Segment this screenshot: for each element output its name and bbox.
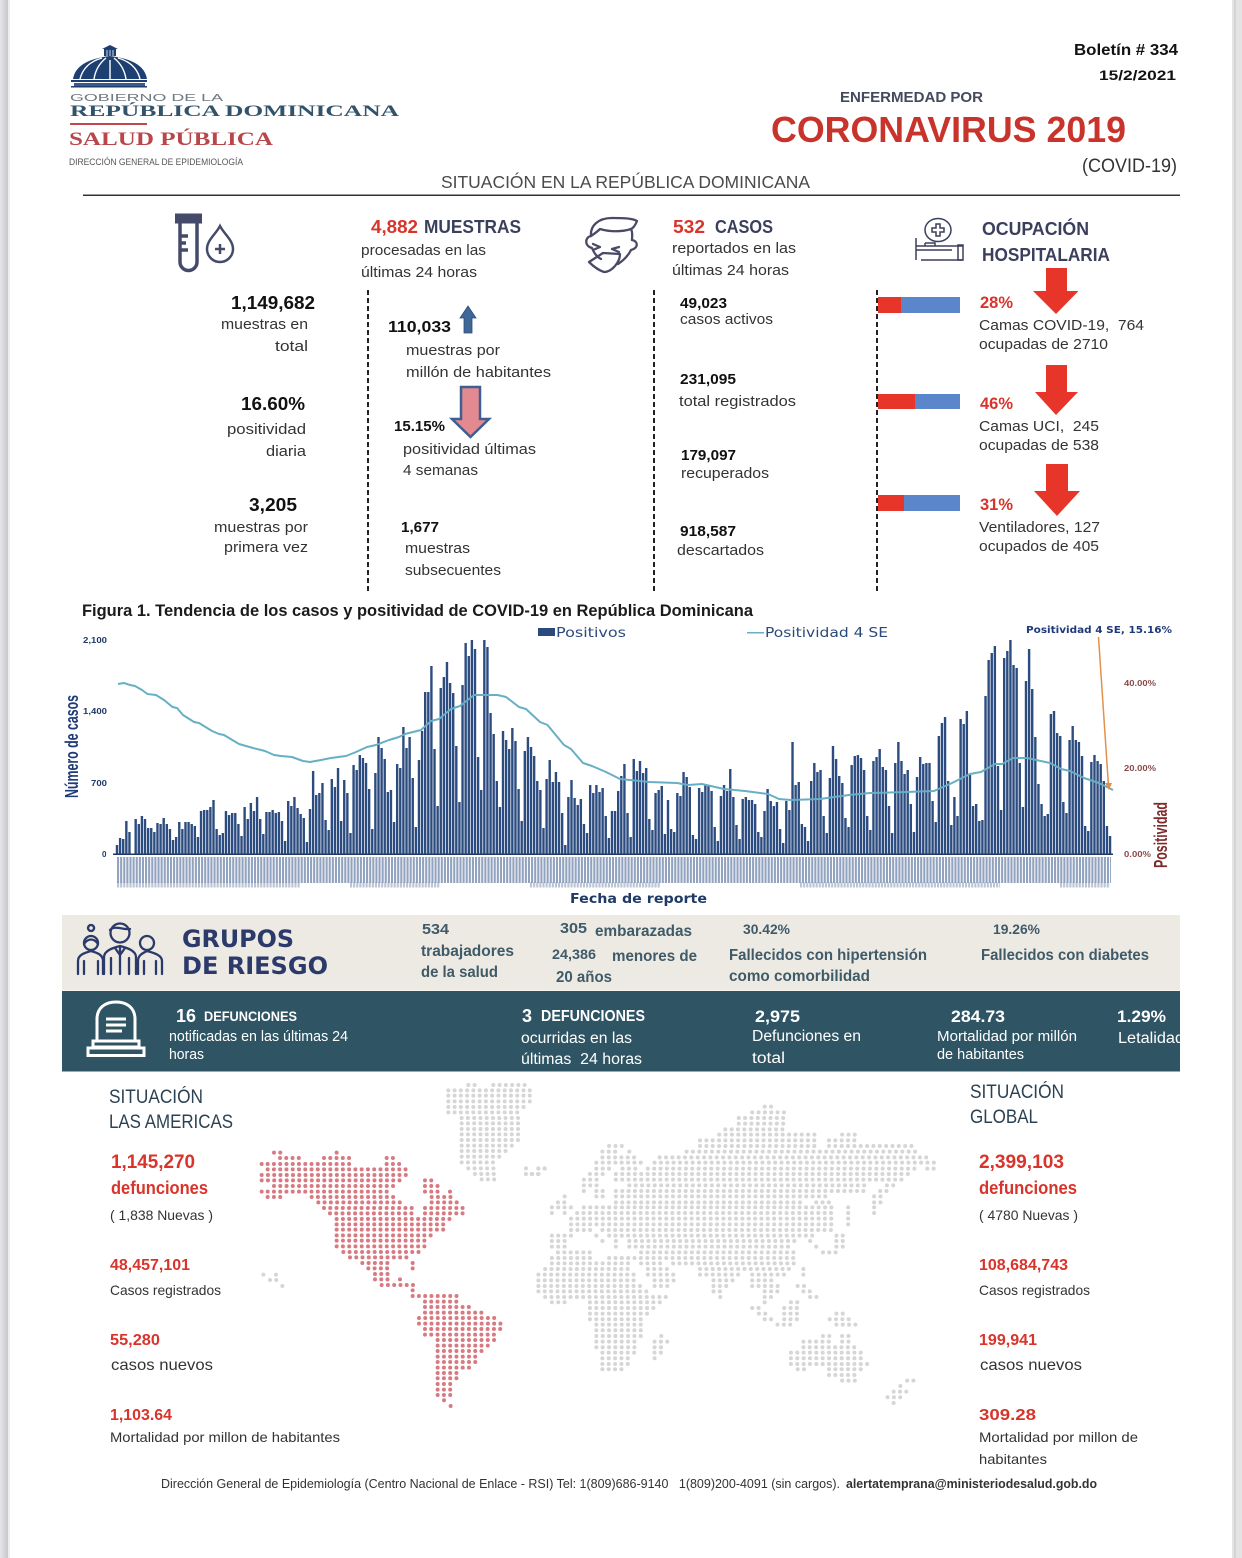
stat: casos activos bbox=[680, 296, 773, 328]
title kicker: ENFERMEDAD POR bbox=[840, 89, 983, 106]
muestras headline bbox=[371, 216, 521, 237]
casos description bbox=[672, 240, 796, 279]
panel: muestras bbox=[176, 215, 521, 556]
stat: positividad últimas 4 semanas bbox=[394, 419, 536, 479]
text: camas uci: ocupadas de 538 bbox=[979, 437, 1099, 454]
map: greenland and hawaii bbox=[263, 1085, 546, 1286]
text: camas covid bbox=[979, 293, 1144, 353]
bar: camas covid 28% bbox=[878, 297, 960, 313]
group: trabajadores de la salud: de la salud bbox=[421, 964, 498, 981]
bulletin date: 15/2/2021 bbox=[1099, 67, 1176, 83]
group: diabetes: 19.26% bbox=[993, 921, 1041, 937]
americas deaths: 1,145,270 bbox=[111, 1152, 195, 1173]
text: camas covid: ocupadas de 2710 bbox=[979, 336, 1108, 353]
stat: descartados: descartados bbox=[677, 542, 764, 559]
date ticks bbox=[117, 870, 1111, 885]
stat: letalidad: 1.29% bbox=[1117, 1007, 1166, 1026]
global mortality: 309.28 bbox=[979, 1407, 1036, 1424]
stat: positividad últimas 4 semanas: positividad últimas bbox=[403, 441, 536, 458]
global mortality: habitantes bbox=[979, 1451, 1047, 1467]
left axis labels: 2,100 bbox=[83, 636, 108, 645]
stat: mortalidad por millón bbox=[938, 1010, 1076, 1059]
hospital heading bbox=[982, 218, 1110, 265]
stat: recuperados bbox=[681, 448, 769, 482]
stat: 3 defunciones: 3 bbox=[522, 1006, 532, 1026]
divider: logo red line bbox=[70, 123, 147, 125]
stat: positividad diaria: 16.60% bbox=[241, 393, 305, 414]
stat: recuperados: 179,097 bbox=[681, 448, 736, 464]
stat: muestras por millón: millón de habitantes bbox=[406, 364, 551, 381]
item: ventiladores bbox=[878, 464, 1100, 555]
arrow: down red bbox=[1035, 365, 1078, 415]
arrow: up bbox=[460, 306, 476, 333]
grupos heading: GRUPOS bbox=[182, 925, 294, 953]
casos description: reportados en las bbox=[672, 240, 796, 257]
group: diabetes: Fallecidos con diabetes bbox=[981, 947, 1149, 964]
text: camas covid: 28% bbox=[980, 293, 1013, 312]
stat: defunciones en total: 2,975 bbox=[755, 1007, 800, 1026]
muestras headline: 4,882 bbox=[371, 216, 418, 237]
americas new cases: 55,280 bbox=[110, 1332, 160, 1349]
icon: dome bbox=[71, 45, 147, 88]
stat: positividad diaria bbox=[227, 393, 307, 460]
section heading: SITUACIÓN EN LA REPÚBLICA DOMINICANA bbox=[441, 171, 810, 192]
global new cases bbox=[979, 1332, 1082, 1374]
text: ventiladores bbox=[979, 495, 1100, 555]
stat: muestras en total: total bbox=[275, 338, 308, 355]
americas cases bbox=[110, 1257, 221, 1298]
group: menores de 20 años: 24,386 bbox=[552, 946, 596, 962]
muestras description: últimas 24 horas bbox=[361, 264, 477, 281]
group: hipertensión bbox=[729, 921, 927, 985]
text: dirección general de epidemiología: DIRECCIÓN GENERAL DE EPIDEMIOLOGÍA bbox=[69, 157, 244, 168]
global deaths: defunciones bbox=[979, 1178, 1077, 1198]
americas new cases bbox=[110, 1332, 213, 1374]
text: salud pública: SALUD PÚBLICA bbox=[69, 128, 273, 150]
group: hipertensión: 30.42% bbox=[743, 921, 791, 937]
americas mortality: 1,103.64 bbox=[110, 1407, 172, 1424]
stat: total registrados bbox=[679, 372, 796, 410]
arrow: down red bbox=[1033, 268, 1078, 314]
icon: group of people bbox=[78, 924, 162, 974]
stat: defunciones en total bbox=[752, 1010, 860, 1063]
stat: muestras por millón: 110,033 bbox=[388, 319, 451, 336]
stat: total registrados: 231,095 bbox=[680, 372, 736, 388]
global mortality: Mortalidad por millon de bbox=[979, 1429, 1138, 1445]
header: bulletin number and title bbox=[441, 42, 1178, 192]
stat: casos activos: casos activos bbox=[680, 311, 773, 328]
global heading: SITUACIÓN bbox=[970, 1081, 1064, 1103]
stat: letalidad: Letalidad bbox=[1118, 1030, 1184, 1047]
text: gobierno de la: GOBIERNO DE LA bbox=[70, 92, 223, 104]
map: americas highlighted bbox=[262, 1085, 546, 1406]
americas deaths bbox=[110, 1152, 213, 1223]
stat: casos activos: 49,023 bbox=[680, 296, 727, 312]
chart legend: Positivos bbox=[556, 625, 626, 641]
group: trabajadores de la salud: trabajadores bbox=[421, 943, 514, 960]
americas cases: 48,457,101 bbox=[110, 1257, 190, 1274]
stat: positividad últimas 4 semanas: 15.15% bbox=[394, 419, 445, 435]
left axis labels: 0 bbox=[102, 850, 107, 859]
stat: muestras por primera vez: primera vez bbox=[224, 539, 308, 556]
left axis labels bbox=[83, 636, 108, 859]
text: camas uci: 46% bbox=[980, 394, 1013, 413]
chart legend: Positividad 4 SE bbox=[765, 625, 888, 641]
group: diabetes bbox=[981, 921, 1149, 964]
stat: mortalidad por millón: Mortalidad por millón bbox=[937, 1029, 1077, 1045]
stat: mortalidad por millón: 284.73 bbox=[951, 1007, 1005, 1026]
stat: defunciones en total: Defunciones en bbox=[752, 1028, 861, 1045]
panel: casos bbox=[586, 216, 796, 559]
stat: positividad últimas 4 semanas: 4 semanas bbox=[403, 462, 478, 479]
icon: face with mask bbox=[586, 218, 637, 272]
text: ventiladores: Ventiladores, 127 bbox=[979, 519, 1100, 536]
grupos heading bbox=[182, 925, 328, 980]
americas mortality: Mortalidad por millon de habitantes bbox=[110, 1429, 340, 1445]
stat: 16 defunciones bbox=[170, 1009, 348, 1059]
footer: contact information: Dirección General de Epidemiología (Centro Nacional de Enlace - RSI) Tel: 1(809)686-9140 1(809)200-4091 (sin cargos). bbox=[161, 1477, 840, 1491]
stat: mortalidad por millón: de habitantes bbox=[937, 1047, 1024, 1063]
title: CORONAVIRUS 2019 bbox=[771, 109, 1126, 150]
panel: defunciones bbox=[62, 991, 1184, 1072]
panel: grupos de riesgo bbox=[62, 915, 1180, 990]
stat: muestras por primera vez bbox=[214, 494, 308, 556]
casos headline: 532 bbox=[673, 216, 705, 237]
stat: 16 defunciones: 16 bbox=[176, 1006, 196, 1026]
text: ventiladores: ocupados de 405 bbox=[979, 538, 1099, 555]
muestras headline: MUESTRAS bbox=[424, 216, 521, 237]
stat: muestras subsecuentes: subsecuentes bbox=[405, 562, 501, 579]
muestras description: procesadas en las bbox=[361, 242, 486, 259]
global cases bbox=[979, 1257, 1090, 1298]
stat: 3 defunciones: últimas 24 horas bbox=[521, 1051, 642, 1068]
icon: hospital bed bbox=[916, 218, 963, 260]
stat: 16 defunciones: DEFUNCIONES bbox=[204, 1008, 297, 1024]
stat: positividad diaria: diaria bbox=[266, 443, 307, 460]
americas heading bbox=[109, 1086, 233, 1133]
arrow: down bbox=[452, 387, 489, 437]
global heading bbox=[970, 1081, 1064, 1128]
stat: total registrados: total registrados bbox=[679, 393, 796, 410]
stat: muestras por millón bbox=[388, 319, 551, 381]
chart: trend of cases and positivity bbox=[62, 625, 1172, 907]
group: menores de 20 años bbox=[552, 946, 697, 986]
global deaths: 2,399,103 bbox=[979, 1152, 1064, 1173]
panel: situación las américas bbox=[109, 1086, 340, 1445]
line: positividad 4 SE bbox=[118, 683, 1113, 800]
global deaths bbox=[979, 1152, 1078, 1223]
annotation: positividad 4 SE 15.16% bbox=[1026, 625, 1172, 790]
hospital heading: OCUPACIÓN bbox=[982, 218, 1089, 239]
text: república dominicana: REPÚBLICA DOMINICANA bbox=[70, 101, 400, 120]
stat: muestras subsecuentes: 1,677 bbox=[401, 520, 439, 536]
hospital heading: HOSPITALARIA bbox=[982, 245, 1110, 265]
item: camas covid bbox=[878, 268, 1144, 353]
stat: muestras por millón: muestras por bbox=[406, 342, 500, 359]
arrow: down red bbox=[1034, 464, 1080, 516]
group: trabajadores de la salud: 534 bbox=[422, 921, 450, 938]
left axis labels: 700 bbox=[91, 779, 108, 788]
panel: ocupación hospitalaria bbox=[878, 218, 1144, 555]
right axis labels: 20.00% bbox=[1124, 764, 1156, 773]
group: embarazadas bbox=[560, 920, 692, 940]
stat: descartados: 918,587 bbox=[680, 524, 736, 540]
global cases: Casos registrados bbox=[979, 1282, 1090, 1298]
bar: camas uci 46% bbox=[878, 394, 960, 409]
stat: 3 defunciones: DEFUNCIONES bbox=[541, 1008, 645, 1025]
title suffix: (COVID-19) bbox=[1082, 156, 1177, 177]
group: trabajadores de la salud bbox=[421, 921, 514, 981]
map: world dot map bbox=[262, 1085, 935, 1406]
stat: muestras en total: 1,149,682 bbox=[231, 293, 315, 313]
x axis title: Fecha de reporte bbox=[570, 891, 707, 907]
global new cases: casos nuevos bbox=[980, 1357, 1082, 1374]
chart legend bbox=[538, 625, 888, 641]
grupos heading: DE RIESGO bbox=[182, 952, 328, 980]
text: camas uci: Camas UCI, 245 bbox=[979, 418, 1099, 435]
group: menores de 20 años: 20 años bbox=[556, 969, 612, 986]
global deaths: ( 4780 Nuevas ) bbox=[979, 1207, 1078, 1223]
stat: 3 defunciones: ocurridas en las bbox=[521, 1030, 632, 1047]
casos headline: CASOS bbox=[715, 216, 773, 237]
figure title: Figura 1. Tendencia de los casos y positividad de COVID-19 en República Dominicana bbox=[82, 601, 754, 620]
text: ventiladores: 31% bbox=[980, 495, 1013, 514]
stat: 3 defunciones bbox=[522, 1009, 644, 1064]
left axis labels: 1,400 bbox=[83, 707, 108, 716]
text: camas uci bbox=[979, 394, 1099, 454]
global mortality bbox=[979, 1407, 1138, 1467]
text: camas covid: Camas COVID-19, 764 bbox=[979, 317, 1144, 334]
stat: muestras en total bbox=[221, 293, 315, 355]
group: menores de 20 años: menores de bbox=[612, 948, 697, 965]
icon: test tube and blood drop bbox=[176, 215, 233, 270]
stat: muestras por primera vez: muestras por bbox=[214, 519, 308, 536]
americas deaths: defunciones bbox=[111, 1178, 208, 1198]
group: embarazadas: 305 bbox=[560, 920, 587, 937]
axis baseline bbox=[113, 854, 1113, 855]
bulletin number: Boletín # 334 bbox=[1074, 42, 1178, 59]
global cases: 108,684,743 bbox=[979, 1257, 1068, 1274]
right axis labels: 40.00% bbox=[1124, 679, 1156, 688]
stat: defunciones en total: total bbox=[752, 1050, 785, 1067]
logo: Gobierno de la República Dominicana, Salud Pública bbox=[69, 45, 400, 168]
muestras description bbox=[361, 242, 486, 281]
item: camas uci bbox=[878, 365, 1099, 454]
group: hipertensión: como comorbilidad bbox=[729, 968, 870, 985]
stat: recuperados: recuperados bbox=[681, 465, 769, 482]
stat: 16 defunciones: horas bbox=[169, 1047, 204, 1063]
stat: 16 defunciones: notificadas en las últimas 24 bbox=[169, 1029, 348, 1045]
group: hipertensión: Fallecidos con hipertensión bbox=[729, 947, 927, 964]
right axis title: Positividad bbox=[1151, 802, 1171, 868]
stat: letalidad bbox=[1118, 1010, 1180, 1043]
stat: muestras por primera vez: 3,205 bbox=[249, 494, 297, 515]
stat: muestras subsecuentes bbox=[401, 520, 501, 579]
icon: tombstone bbox=[88, 1002, 144, 1056]
bars: positivos bbox=[117, 640, 1110, 854]
panel: muestras column 2 bbox=[388, 306, 551, 579]
right axis labels bbox=[1124, 679, 1156, 859]
footer: contact information: alertatemprana@ministeriodesalud.gob.do bbox=[846, 1477, 1097, 1491]
americas heading: SITUACIÓN bbox=[109, 1086, 203, 1108]
bar: ventiladores 31% bbox=[878, 495, 960, 511]
right axis labels: 0.00% bbox=[1124, 850, 1151, 859]
stat: muestras en total: muestras en bbox=[221, 316, 308, 333]
stat: descartados bbox=[677, 524, 764, 559]
americas cases: Casos registrados bbox=[110, 1282, 221, 1298]
stat: positividad diaria: positividad bbox=[227, 421, 306, 438]
panel: situación global bbox=[970, 1081, 1138, 1467]
americas new cases: casos nuevos bbox=[111, 1357, 213, 1374]
left axis title: Número de casos bbox=[62, 695, 82, 798]
global heading: GLOBAL bbox=[970, 1107, 1038, 1128]
casos headline bbox=[673, 216, 773, 237]
annotation: positividad 4 SE 15.16%: Positividad 4 SE, 15.16% bbox=[1026, 625, 1172, 636]
map: eurasia africa oceania bbox=[532, 1107, 935, 1403]
stat: muestras subsecuentes: muestras bbox=[405, 540, 470, 557]
americas mortality bbox=[110, 1407, 340, 1445]
group: embarazadas: embarazadas bbox=[595, 923, 692, 940]
casos description: últimas 24 horas bbox=[672, 262, 789, 279]
americas heading: LAS AMERICAS bbox=[109, 1112, 233, 1133]
global new cases: 199,941 bbox=[979, 1332, 1037, 1349]
americas deaths: ( 1,838 Nuevas ) bbox=[110, 1207, 213, 1223]
